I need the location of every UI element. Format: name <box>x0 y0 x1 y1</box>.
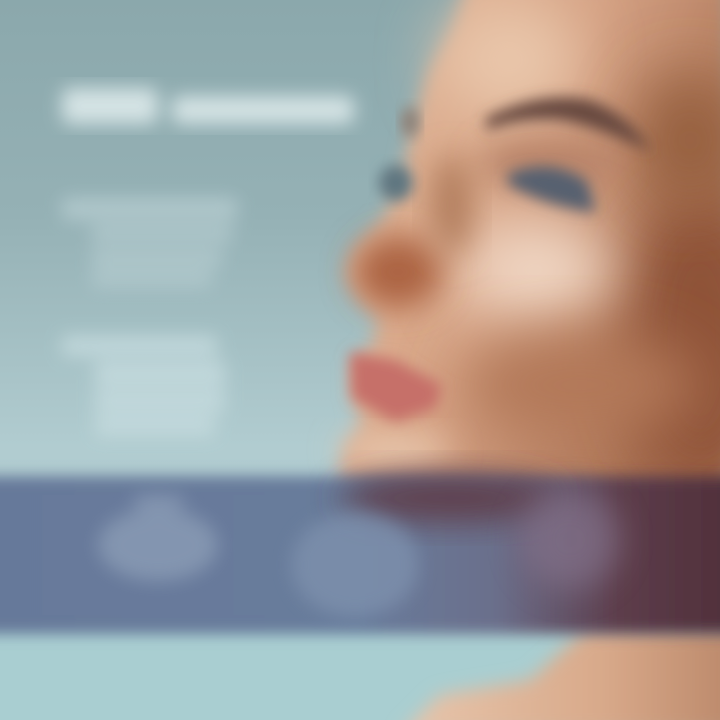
face shape <box>338 0 720 490</box>
band icon: left <box>98 495 218 581</box>
eye <box>508 166 596 212</box>
temple shadow <box>635 70 720 210</box>
jaw tone <box>460 335 700 435</box>
far eye <box>379 165 413 201</box>
band icon: right <box>520 490 620 590</box>
far eyebrow <box>401 107 419 137</box>
neck <box>400 630 720 720</box>
lips <box>350 352 442 422</box>
band panel <box>0 476 720 634</box>
text block: lower <box>62 336 225 436</box>
right side shadow <box>620 190 720 490</box>
eyebrow <box>486 97 652 152</box>
text block: upper <box>62 198 237 286</box>
portrait: face <box>338 0 720 490</box>
heading <box>62 88 354 124</box>
bottom strip <box>0 625 720 720</box>
band shadow under chin <box>340 474 560 522</box>
nose bridge <box>432 155 472 255</box>
band icon: middle <box>291 513 419 617</box>
nose <box>354 236 442 308</box>
eye socket shadow <box>480 137 620 193</box>
chin light <box>340 434 450 466</box>
forehead light <box>440 0 580 120</box>
cheek highlight <box>457 218 613 322</box>
